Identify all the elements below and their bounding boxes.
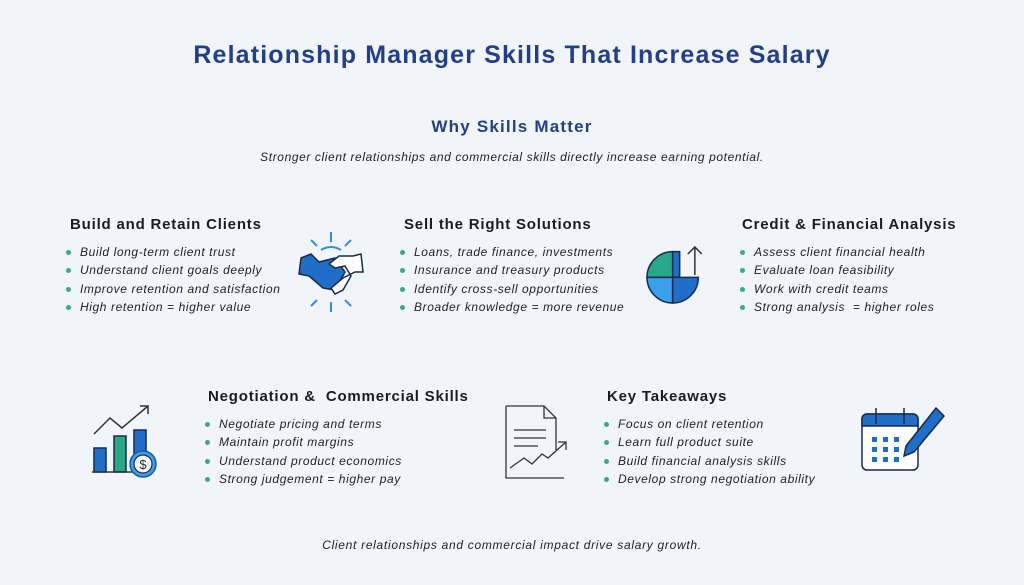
bullets: Insurance and treasury products bbox=[414, 263, 605, 277]
icon: pie chart bbox=[646, 246, 702, 304]
icon: calendar and pen bbox=[861, 406, 945, 471]
icon: handshake bbox=[298, 232, 364, 312]
bullets bbox=[205, 417, 402, 486]
bullets: Strong analysis = higher roles bbox=[754, 300, 934, 314]
panel: credit and financial analysis bbox=[740, 216, 956, 314]
bullets: Learn full product suite bbox=[618, 435, 754, 449]
bullets: Build financial analysis skills bbox=[618, 454, 787, 468]
bullets: Develop strong negotiation ability bbox=[618, 472, 815, 486]
bullets: Understand client goals deeply bbox=[80, 263, 262, 277]
panel: key takeaways bbox=[604, 388, 816, 486]
bullets bbox=[740, 245, 934, 314]
icon: document with trend bbox=[505, 405, 567, 479]
bullets: Negotiate pricing and terms bbox=[219, 417, 382, 431]
bullets: Broader knowledge = more revenue bbox=[414, 300, 624, 314]
bullets: Assess client financial health bbox=[754, 245, 925, 259]
bullets bbox=[400, 245, 624, 314]
heading: Credit & Financial Analysis bbox=[742, 216, 956, 233]
bullets: Improve retention and satisfaction bbox=[80, 282, 280, 296]
subtitle: Why Skills Matter bbox=[431, 117, 593, 136]
icon: growth chart with dollar bbox=[92, 405, 157, 478]
footer: Client relationships and commercial impact drive salary growth. bbox=[322, 538, 702, 552]
bullets: Maintain profit margins bbox=[219, 435, 354, 449]
bullets bbox=[604, 417, 816, 486]
heading: Build and Retain Clients bbox=[70, 216, 262, 233]
bullets: Build long-term client trust bbox=[80, 245, 236, 259]
bullets: Understand product economics bbox=[219, 454, 402, 468]
intro text: Stronger client relationships and commercial skills directly increase earning potential. bbox=[260, 150, 764, 164]
bullets bbox=[66, 245, 280, 314]
title: Relationship Manager Skills That Increase Salary bbox=[193, 41, 831, 69]
heading: Sell the Right Solutions bbox=[404, 216, 592, 233]
bullets: Strong judgement = higher pay bbox=[219, 472, 401, 486]
panel: negotiation bbox=[205, 388, 469, 486]
bullets: Evaluate loan feasibility bbox=[754, 263, 894, 277]
bullets: High retention = higher value bbox=[80, 300, 251, 314]
panel: build and retain clients bbox=[66, 216, 280, 314]
bullets: Loans, trade finance, investments bbox=[414, 245, 613, 259]
bullets: Identify cross-sell opportunities bbox=[414, 282, 599, 296]
bullets: Focus on client retention bbox=[618, 417, 764, 431]
heading: Key Takeaways bbox=[607, 388, 727, 405]
panel: sell the right solutions bbox=[400, 216, 624, 314]
icon: growth chart with dollar: $ bbox=[139, 457, 147, 472]
bullets: Work with credit teams bbox=[754, 282, 889, 296]
heading: Negotiation & Commercial Skills bbox=[208, 388, 469, 405]
